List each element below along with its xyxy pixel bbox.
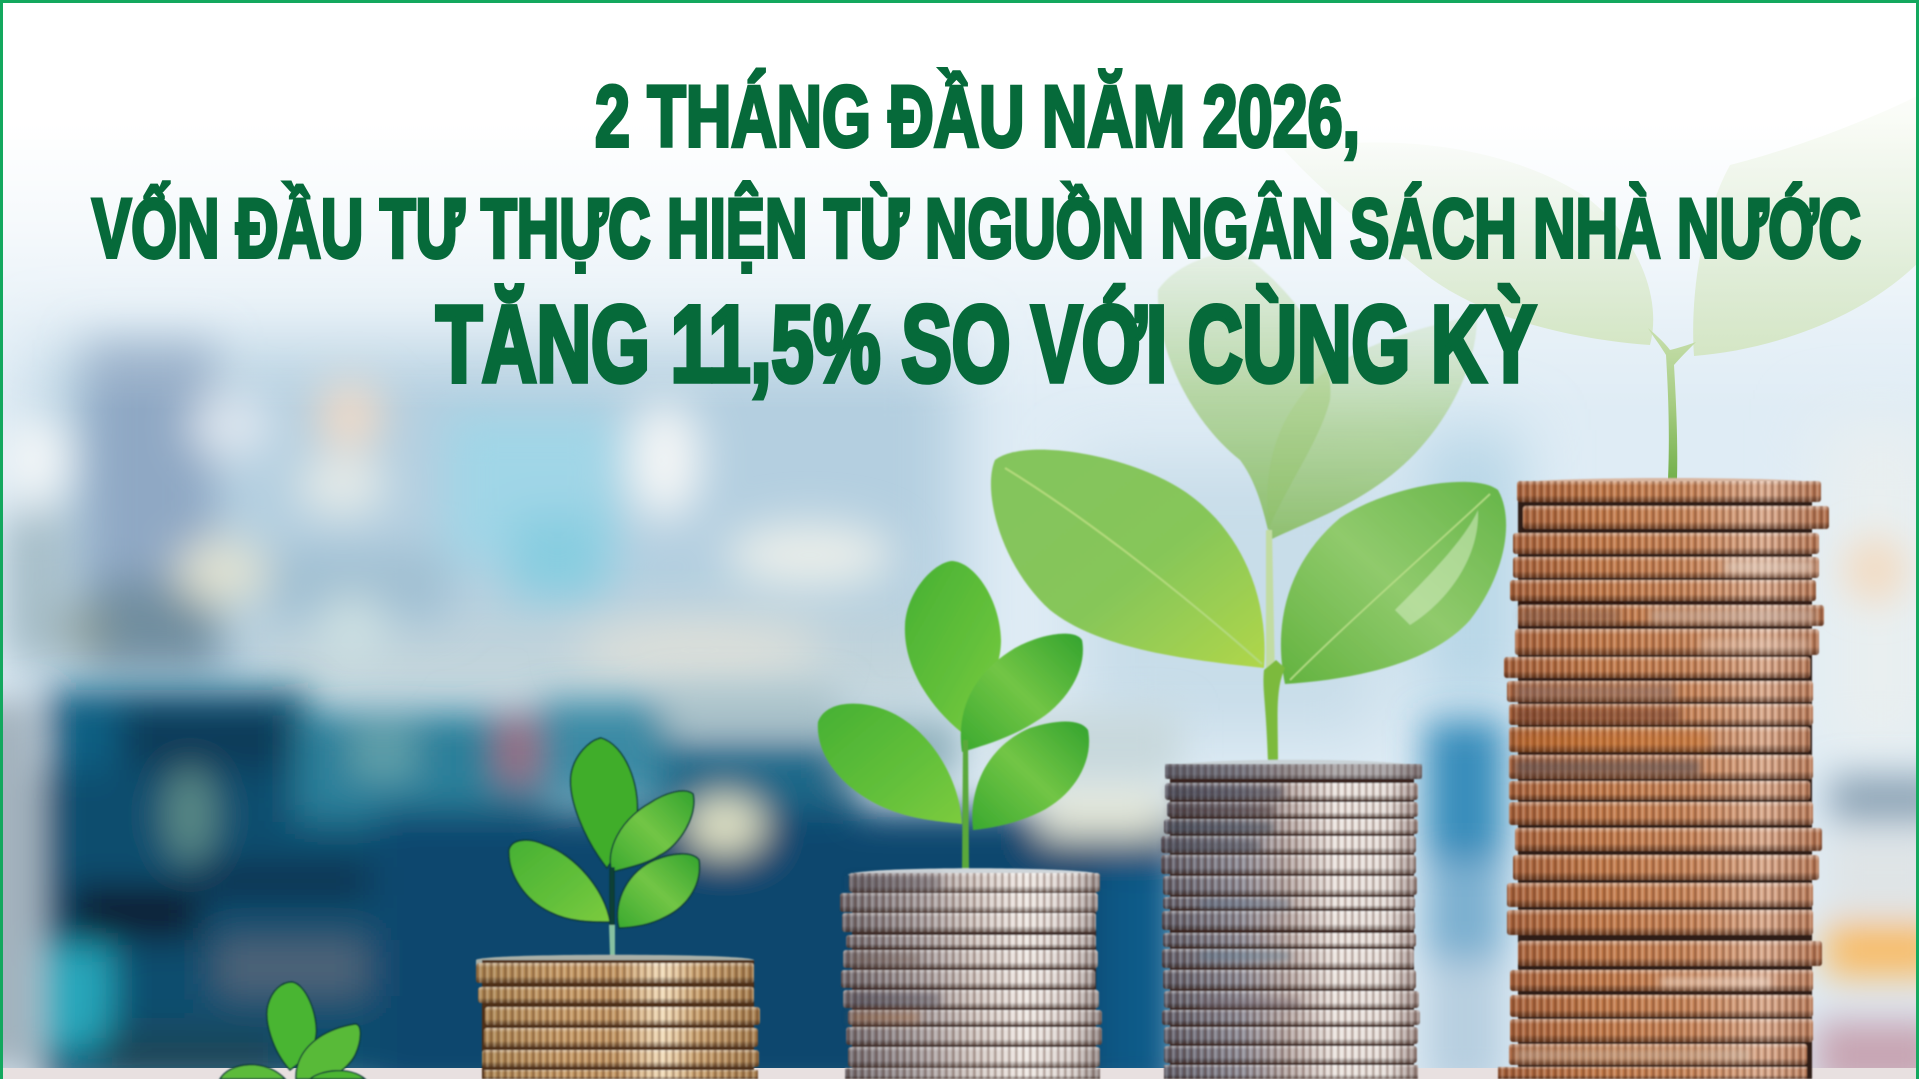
faint upper seedling behind title	[1284, 95, 1919, 480]
title line 1: 2 THÁNG ĐẦU NĂM 2026,	[595, 68, 1360, 165]
shelf surface under coins	[0, 1068, 1919, 1079]
plant: second seedling	[818, 561, 1089, 872]
coin stack: gold	[476, 955, 760, 1079]
plant: third seedling	[991, 253, 1506, 762]
coin stack: silver tall	[1161, 760, 1422, 1079]
plant: first seedling	[509, 738, 699, 955]
coin stack: copper tallest	[1498, 478, 1829, 1079]
coin stack: silver small	[840, 868, 1102, 1079]
title	[92, 68, 1861, 404]
plant: smallest seedling	[220, 982, 365, 1079]
